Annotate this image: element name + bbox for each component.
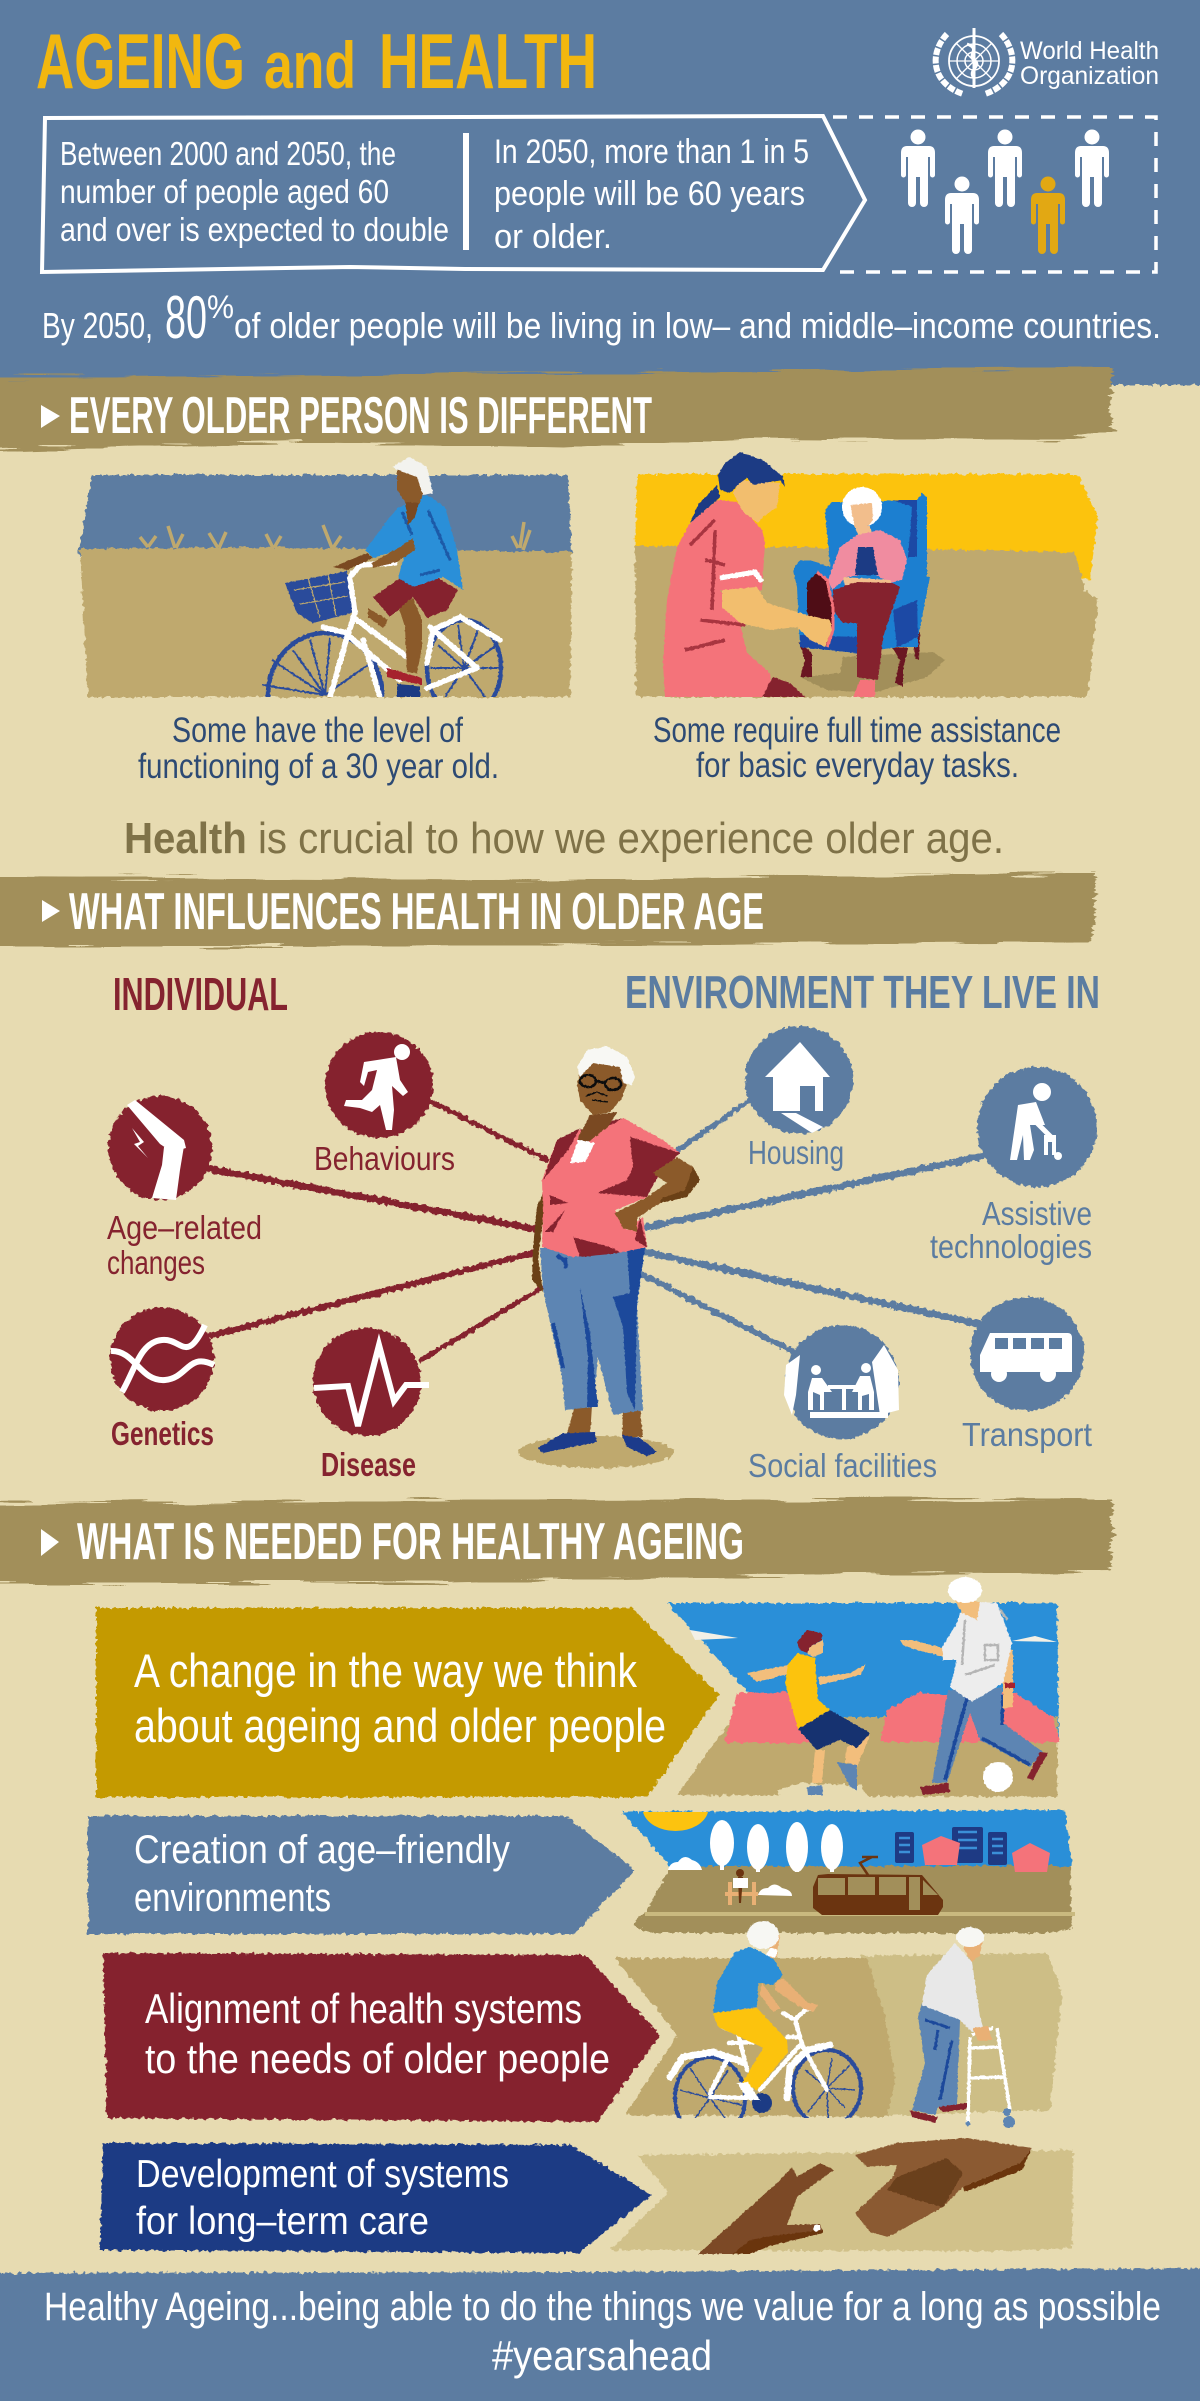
older man with walker	[910, 1927, 1015, 2128]
factor: housing: Housing	[748, 1134, 844, 1171]
armchair	[793, 493, 930, 653]
factor: assistive technologies: Assistive	[982, 1195, 1092, 1232]
nurse	[663, 452, 832, 697]
illustration: helping hands	[610, 2138, 1073, 2254]
arrow box with statistics	[42, 116, 865, 272]
title: and	[264, 28, 356, 102]
dashed frame with people icons	[833, 117, 1156, 272]
icon: person	[1075, 130, 1109, 207]
illustration: nurse helping older woman	[635, 452, 1098, 697]
shirt	[542, 1118, 680, 1257]
bicycle wheels	[262, 618, 504, 697]
statement: health is crucial: Health is crucial to how we experience older age.	[124, 814, 1004, 863]
upper hand	[855, 2138, 1032, 2237]
factor: social facilities	[748, 1325, 937, 1484]
statistic text: 1 in 5: people will be 60 years	[494, 175, 805, 213]
need 3: aligned health systems: Alignment of health systems	[145, 1985, 582, 2032]
need 2: age-friendly environments: Creation of age–friendly	[134, 1828, 510, 1872]
boy	[747, 1630, 870, 1795]
WHO logo: Organization	[1020, 62, 1159, 90]
section heading: what influences health: WHAT INFLUENCES HEALTH IN OLDER AGE	[69, 883, 764, 941]
icon: person with walker	[1010, 1083, 1062, 1160]
factor: age-related changes	[107, 1096, 262, 1281]
factor: disease	[313, 1328, 429, 1483]
caption: left: Some have the level of	[172, 711, 463, 750]
need 4: long-term care	[100, 2143, 652, 2253]
older woman	[807, 487, 907, 697]
statistic text: double	[60, 135, 449, 248]
icon: knee	[127, 1100, 186, 1200]
chair legs	[799, 632, 920, 687]
need 1: change in thinking: about ageing and older people	[134, 1699, 666, 1752]
need 2: age-friendly environments	[88, 1816, 635, 1934]
title: AGEING	[36, 17, 245, 105]
section heading: what is needed	[0, 1499, 1112, 1583]
80 percent statement: %	[207, 289, 234, 325]
icon: people at table	[784, 1345, 899, 1418]
factor: housing	[745, 1026, 853, 1171]
caption: right	[653, 711, 1061, 785]
80 percent statement: 80	[165, 284, 207, 351]
icon: highlighted person	[1031, 176, 1065, 254]
illustration: woman cycling	[77, 457, 574, 698]
need 1: change in thinking: A change in the way we think	[134, 1644, 637, 1697]
factor: age-related changes: Age–related	[107, 1209, 262, 1246]
illustration: older cyclist and man with walker	[615, 1921, 1062, 2139]
factor: genetics: Genetics	[111, 1415, 214, 1452]
factor: behaviours: Behaviours	[314, 1140, 455, 1177]
statistic text: double: number of people aged 60	[60, 173, 389, 210]
statistic text: 1 in 5	[494, 133, 809, 256]
statistic text: 1 in 5: or older.	[494, 218, 612, 256]
factor: genetics	[110, 1307, 214, 1452]
statistic text: 1 in 5: In 2050, more than 1 in 5	[494, 133, 809, 171]
icon: person	[901, 130, 935, 207]
right arm	[615, 1157, 700, 1232]
factor: disease: Disease	[321, 1446, 416, 1483]
statistic text: double: Between 2000 and 2050, the	[60, 135, 396, 172]
older man	[900, 1577, 1048, 1795]
icon: bus	[980, 1333, 1072, 1382]
caption: right: for basic everyday tasks.	[696, 746, 1019, 785]
caption: left	[138, 711, 499, 786]
tram	[813, 1857, 943, 1915]
need 3: aligned health systems	[103, 1953, 660, 2122]
central older woman figure	[518, 1046, 700, 1468]
title	[36, 17, 597, 105]
floor shadow	[800, 652, 945, 693]
rider	[368, 608, 388, 628]
section heading: every older person is different	[0, 367, 1116, 450]
need 1: change in thinking	[96, 1608, 719, 1797]
illustration: age-friendly city	[622, 1810, 1075, 1933]
factor: transport	[962, 1297, 1092, 1453]
icon: DNA strands	[111, 1325, 214, 1392]
icon: heartbeat	[314, 1345, 429, 1426]
icon: runner	[344, 1044, 410, 1130]
WHO logo	[936, 28, 1159, 94]
factor: age-related changes: changes	[107, 1244, 205, 1281]
icon: house	[765, 1042, 830, 1133]
lower hand	[698, 2163, 834, 2254]
cyclist	[670, 1921, 861, 2139]
section heading: every older person is different: EVERY OLDER PERSON IS DIFFERENT	[69, 387, 652, 445]
need 2: age-friendly environments: environments	[134, 1876, 331, 1920]
icon: person	[988, 130, 1022, 207]
factor: assistive technologies: technologies	[930, 1228, 1092, 1265]
factor: transport: Transport	[962, 1416, 1092, 1453]
icon: person	[945, 176, 979, 254]
bicycle frame	[323, 563, 500, 697]
header panel	[0, 0, 1200, 385]
need 4: long-term care: Development of systems	[136, 2153, 509, 2196]
hashtag: #yearsahead	[492, 2332, 712, 2379]
head	[577, 1063, 627, 1115]
WHO logo: World Health	[1020, 37, 1159, 65]
caption: right: Some require full time assistance	[653, 711, 1061, 750]
basket	[285, 571, 352, 623]
need 3: aligned health systems: to the needs of older people	[145, 2035, 610, 2082]
need 4: long-term care: for long–term care	[136, 2200, 429, 2243]
caption: left: functioning of a 30 year old.	[138, 747, 499, 786]
factor: assistive technologies	[930, 1067, 1097, 1265]
connector lines	[210, 1101, 983, 1360]
statistic text: double: and over is expected to double	[60, 211, 449, 248]
footer panel	[0, 2268, 1200, 2401]
illustration: boy and older man playing football	[667, 1577, 1060, 1797]
trousers	[540, 1248, 645, 1415]
heading: individual: INDIVIDUAL	[113, 968, 288, 1020]
bench with reader	[725, 1869, 758, 1905]
factor: social facilities: Social facilities	[748, 1447, 937, 1484]
80 percent statement: By 2050,	[42, 305, 153, 346]
title: HEALTH	[379, 17, 597, 105]
section heading: what is needed: WHAT IS NEEDED FOR HEALTHY AGEING	[77, 1513, 744, 1571]
80 percent statement	[42, 284, 1161, 351]
factor: behaviours	[314, 1032, 455, 1177]
